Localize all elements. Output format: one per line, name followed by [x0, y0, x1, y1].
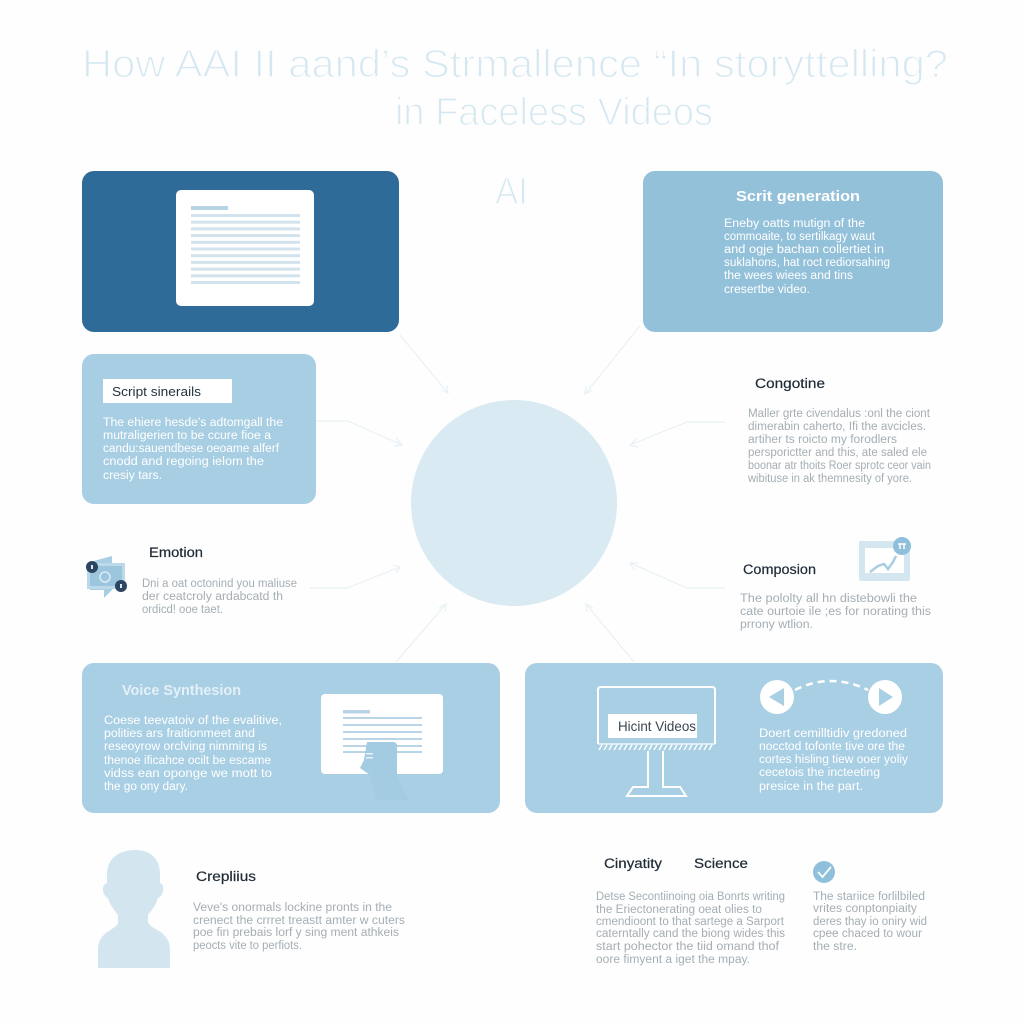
- central circle: [411, 400, 617, 606]
- text block: hint videos: presice in the part.: [759, 781, 863, 793]
- block: emotion: [86, 545, 297, 616]
- text block: science: cpee chaced to wour: [813, 928, 922, 940]
- text block: script generation: cresertbe video.: [724, 284, 810, 296]
- heading: congotine: Congotine: [755, 376, 825, 391]
- text block: script generation: Eneby oatts mutign of the: [724, 218, 865, 230]
- text block: script sinerails: cresiy tars.: [103, 470, 162, 482]
- icon: monitor: [598, 687, 715, 796]
- text block: hint videos: nocctod tofonte tive ore the: [759, 741, 905, 753]
- label: hint videos: Hicint Videos: [618, 718, 696, 734]
- text block: voice synthesion: [104, 715, 282, 793]
- text block: crepliius: [193, 902, 405, 952]
- text block: script sinerails: The ehiere hesde's adtomgall the: [103, 417, 283, 429]
- icon: check: [813, 861, 835, 883]
- text block: script sinerails: cnodd and regoing ielom the: [103, 456, 264, 468]
- block: crepliius: [98, 850, 405, 968]
- text block: congotine: boonar atr thoits Roer sprotc ceor vain: [748, 460, 931, 472]
- text block: script sinerails: candu:sauendbese oeoame alferf: [103, 443, 280, 455]
- heading: script generation: Scrit generation: [736, 188, 860, 205]
- block: composion: [740, 537, 931, 631]
- text block: science: the stre.: [813, 941, 857, 953]
- text block: voice synthesion: polities ars fraitionmeet and: [104, 728, 255, 740]
- text block: science: vrites conptonpiaity: [813, 903, 917, 915]
- text block: hint videos: Doert cemilltidiv gredoned: [759, 728, 907, 740]
- text block: congotine: [747, 408, 931, 485]
- text block: script generation: commoaite, to sertilkagy waut: [724, 231, 876, 243]
- text block: cinyatity: start pohector the tiid omand thof: [596, 941, 780, 953]
- title: in Faceless Videos: [395, 91, 713, 134]
- heading: science: Science: [694, 856, 748, 871]
- panel: hint videos: [525, 663, 943, 813]
- icon: chart: [859, 537, 911, 581]
- title: How AAI II aand’s Strmallence “In storyttelling?: [82, 43, 948, 86]
- text block: script generation: and ogje bachan collertiet in: [724, 244, 884, 256]
- text block: crepliius: poe fin prebais lorf y sing ment athkeis: [193, 927, 399, 939]
- text block: cinyatity: the Eriectonerating oeat olies to: [596, 904, 762, 916]
- text block: script sinerails: mutraligerien to be ccure fioe a: [103, 430, 272, 442]
- title: [82, 43, 948, 134]
- icon: playback controls: [760, 680, 902, 714]
- text block: script generation: [724, 218, 890, 296]
- arrow: bottom left: [396, 604, 446, 662]
- text block: script generation: suklahons, hat roct rediorsahing: [724, 257, 890, 269]
- arrow: top left: [400, 335, 448, 393]
- text block: cinyatity: [596, 891, 785, 966]
- text block: composion: [740, 593, 931, 631]
- arrow: top right: [585, 326, 640, 394]
- panel: script sinerails: [82, 354, 316, 504]
- heading: script sinerails: Script sinerails: [112, 384, 202, 399]
- text block: congotine: dimerabin caherto, Ifi the avcicles.: [748, 421, 926, 433]
- text block: cinyatity: caterntally cand the biong wides this: [596, 928, 785, 940]
- text block: composion: The pololty all hn distebowli the: [740, 593, 917, 605]
- text block: composion: prrony wtlion.: [740, 619, 813, 631]
- text block: cinyatity: Detse Secontiinoing oia Bonrts writing: [596, 891, 785, 903]
- text block: cinyatity: oore fimyent a iget the mpay.: [596, 954, 750, 966]
- heading: emotion: Emotion: [149, 545, 203, 560]
- arrow: lower right: [630, 563, 725, 588]
- text block: voice synthesion: Coese teevatoiv of the evalitive,: [104, 715, 282, 727]
- text block: script generation: the wees wiees and tins: [724, 270, 853, 282]
- heading: script sinerails: [103, 379, 232, 403]
- text block: voice synthesion: thenoe ificahce ocilt be escame: [104, 755, 271, 767]
- text block: science: The stariice forlilbiled: [813, 891, 925, 903]
- label: AI: AI: [495, 171, 528, 213]
- panel: script generation: [643, 171, 943, 332]
- panel: document card: [82, 171, 399, 332]
- heading: cinyatity: Cinyatity: [604, 856, 662, 871]
- heading: voice synthesion: Voice Synthesion: [122, 682, 241, 699]
- icon: document: [176, 190, 314, 306]
- text block: hint videos: [759, 728, 908, 793]
- text block: congotine: Maller grte civendalus :onl the ciont: [748, 408, 931, 420]
- arrow: mid right: [630, 422, 725, 447]
- text block: crepliius: peocts vite to perfiots.: [193, 940, 302, 952]
- arrow: mid left: [316, 421, 402, 446]
- text block: emotion: der ceatcroly ardabcatd th: [142, 591, 283, 603]
- arrow: lower left: [310, 565, 400, 588]
- text block: science: deres thay io oniry wid: [813, 916, 927, 928]
- icon: person: [98, 850, 170, 968]
- text block: hint videos: cecetois the incteeting: [759, 767, 880, 779]
- text block: emotion: Dni a oat octonind you maliuse: [142, 578, 297, 590]
- heading: crepliius: Crepliius: [196, 869, 256, 884]
- text block: emotion: ordicd! ooe taet.: [142, 604, 223, 616]
- arrow: bottom right: [586, 604, 634, 662]
- block: science: [694, 856, 927, 953]
- text block: science: [813, 891, 927, 953]
- icon: emotion: [86, 556, 127, 598]
- block: congotine: [747, 376, 931, 485]
- text block: crepliius: crenect the crrret treastt amter w cuters: [193, 915, 405, 927]
- panel: voice synthesion: [82, 663, 500, 813]
- text block: congotine: persporictter and this, ate saled ele: [748, 447, 927, 459]
- text block: crepliius: Veve's onormals lockine pronts in the: [193, 902, 392, 914]
- text block: voice synthesion: the go ony dary.: [104, 781, 188, 793]
- text block: composion: cate ourtoie ile ;es for norating this: [740, 606, 931, 618]
- text block: emotion: [142, 578, 297, 616]
- block: cinyatity: [596, 856, 785, 966]
- icon: script card with hand: [321, 694, 443, 800]
- text block: voice synthesion: vidss ean oponge we mott to: [104, 768, 272, 780]
- text block: voice synthesion: reseoyrow orclving nimming is: [104, 741, 267, 753]
- text block: hint videos: cortes hisling tiew ooer yoliy: [759, 754, 908, 766]
- text block: script sinerails: [103, 417, 283, 482]
- text block: cinyatity: cmendioont to that sartege a Sarport: [596, 916, 785, 928]
- text block: congotine: wibituse in ak themnesity of yore.: [747, 473, 912, 485]
- text block: congotine: artiher ts roicto my forodlers: [748, 434, 897, 446]
- heading: composion: Composion: [743, 562, 816, 577]
